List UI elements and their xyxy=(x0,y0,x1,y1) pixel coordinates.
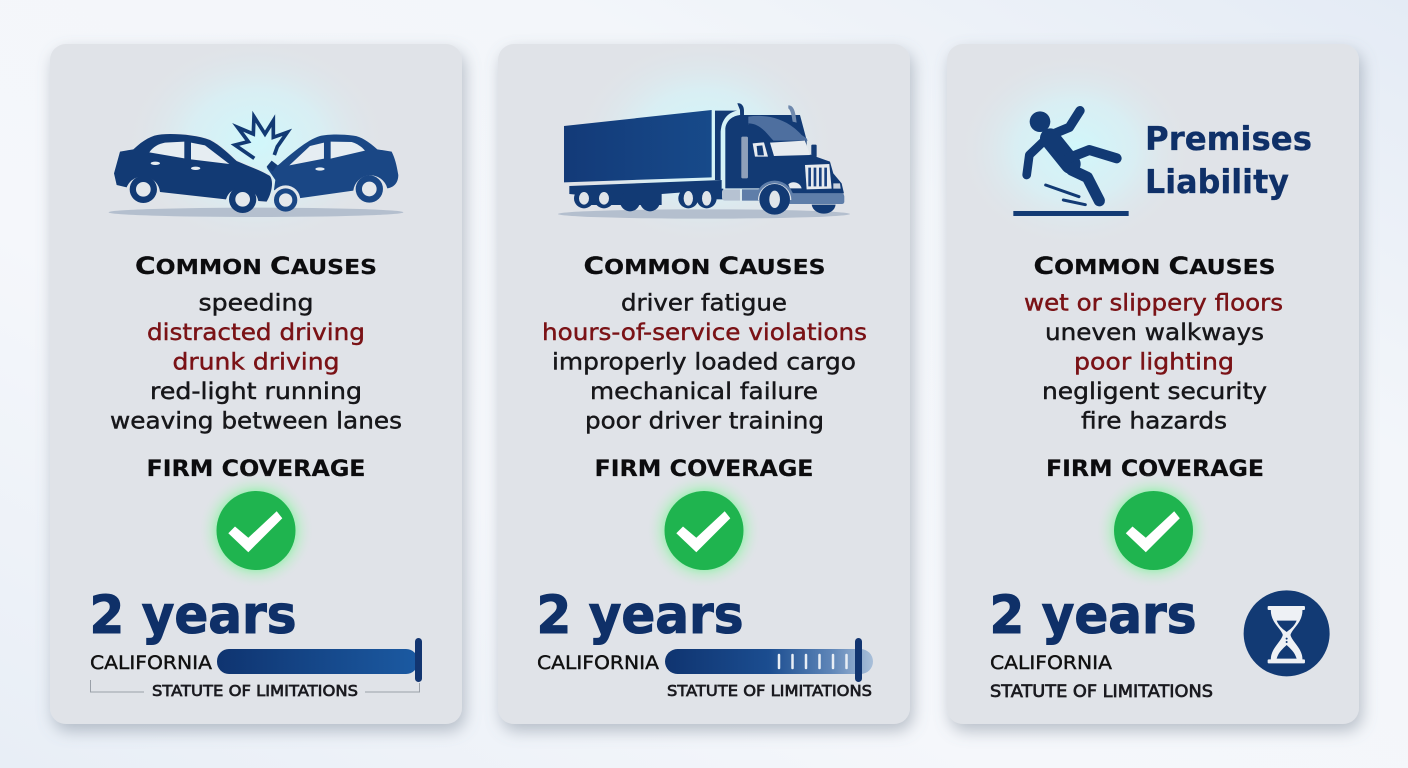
list: causes: distracted driving xyxy=(147,320,365,346)
heading: firm coverage: FIRM COVERAGE xyxy=(1046,456,1264,482)
list: causes: poor driver training xyxy=(585,408,824,434)
panel: car accidents xyxy=(50,37,462,724)
heading: common causes: COMMON CAUSES xyxy=(135,252,377,280)
icon: hourglass xyxy=(1244,590,1330,676)
icon: car collision xyxy=(109,117,403,217)
list: causes: poor lighting xyxy=(1074,350,1234,376)
icon glow xyxy=(955,50,1195,250)
list: causes: hours-of-service violations xyxy=(542,320,867,346)
label: statute of limitations: STATUTE OF LIMITATIONS xyxy=(667,682,872,700)
list: causes: mechanical failure xyxy=(590,379,818,405)
list: causes: speeding xyxy=(198,290,314,316)
panel: truck accidents xyxy=(498,37,910,724)
icon: green check xyxy=(1096,472,1212,588)
list: causes: wet or slippery floors xyxy=(1024,290,1283,316)
list: causes xyxy=(1024,290,1283,434)
heading: common causes: COMMON CAUSES xyxy=(584,252,825,280)
list: causes: negligent security xyxy=(1042,379,1267,405)
statistic: 2 years: 2 years xyxy=(536,585,744,646)
list: causes: improperly loaded cargo xyxy=(552,350,856,376)
label: california: CALIFORNIA xyxy=(990,653,1112,674)
heading: firm coverage: FIRM COVERAGE xyxy=(146,456,366,482)
list: causes: red-light running xyxy=(150,379,362,405)
list: causes: uneven walkways xyxy=(1045,320,1264,346)
label: statute of limitations: STATUTE OF LIMITATIONS xyxy=(990,682,1213,702)
list: causes: driver fatigue xyxy=(621,290,787,316)
icon glow xyxy=(121,37,391,247)
icon: semi truck xyxy=(558,103,850,219)
list: causes xyxy=(110,290,402,434)
statistic: 2 years: 2 years xyxy=(90,585,296,646)
card background xyxy=(498,44,910,724)
list: causes: drunk driving xyxy=(172,350,340,376)
list: causes xyxy=(542,290,867,434)
heading: premises liability xyxy=(1145,119,1312,201)
label: california: CALIFORNIA xyxy=(537,653,659,674)
icon: green check xyxy=(198,472,314,588)
icon: green check xyxy=(646,472,762,588)
icon: person slipping xyxy=(1013,111,1129,216)
timeline bar xyxy=(665,638,873,682)
list: causes: weaving between lanes xyxy=(110,408,402,434)
timeline bar xyxy=(90,638,422,692)
heading: premises liability: Liability xyxy=(1145,162,1289,201)
card background xyxy=(947,44,1359,724)
label: statute of limitations: STATUTE OF LIMITATIONS xyxy=(152,682,358,700)
heading: common causes: COMMON CAUSES xyxy=(1034,252,1276,280)
panel: premises liability xyxy=(947,44,1359,724)
statistic: 2 years: 2 years xyxy=(990,585,1196,646)
list: causes: fire hazards xyxy=(1081,408,1227,434)
heading: premises liability: Premises xyxy=(1145,119,1312,158)
icon glow xyxy=(569,37,839,247)
heading: firm coverage: FIRM COVERAGE xyxy=(594,456,814,482)
card background xyxy=(50,44,462,724)
label: california: CALIFORNIA xyxy=(90,653,212,674)
